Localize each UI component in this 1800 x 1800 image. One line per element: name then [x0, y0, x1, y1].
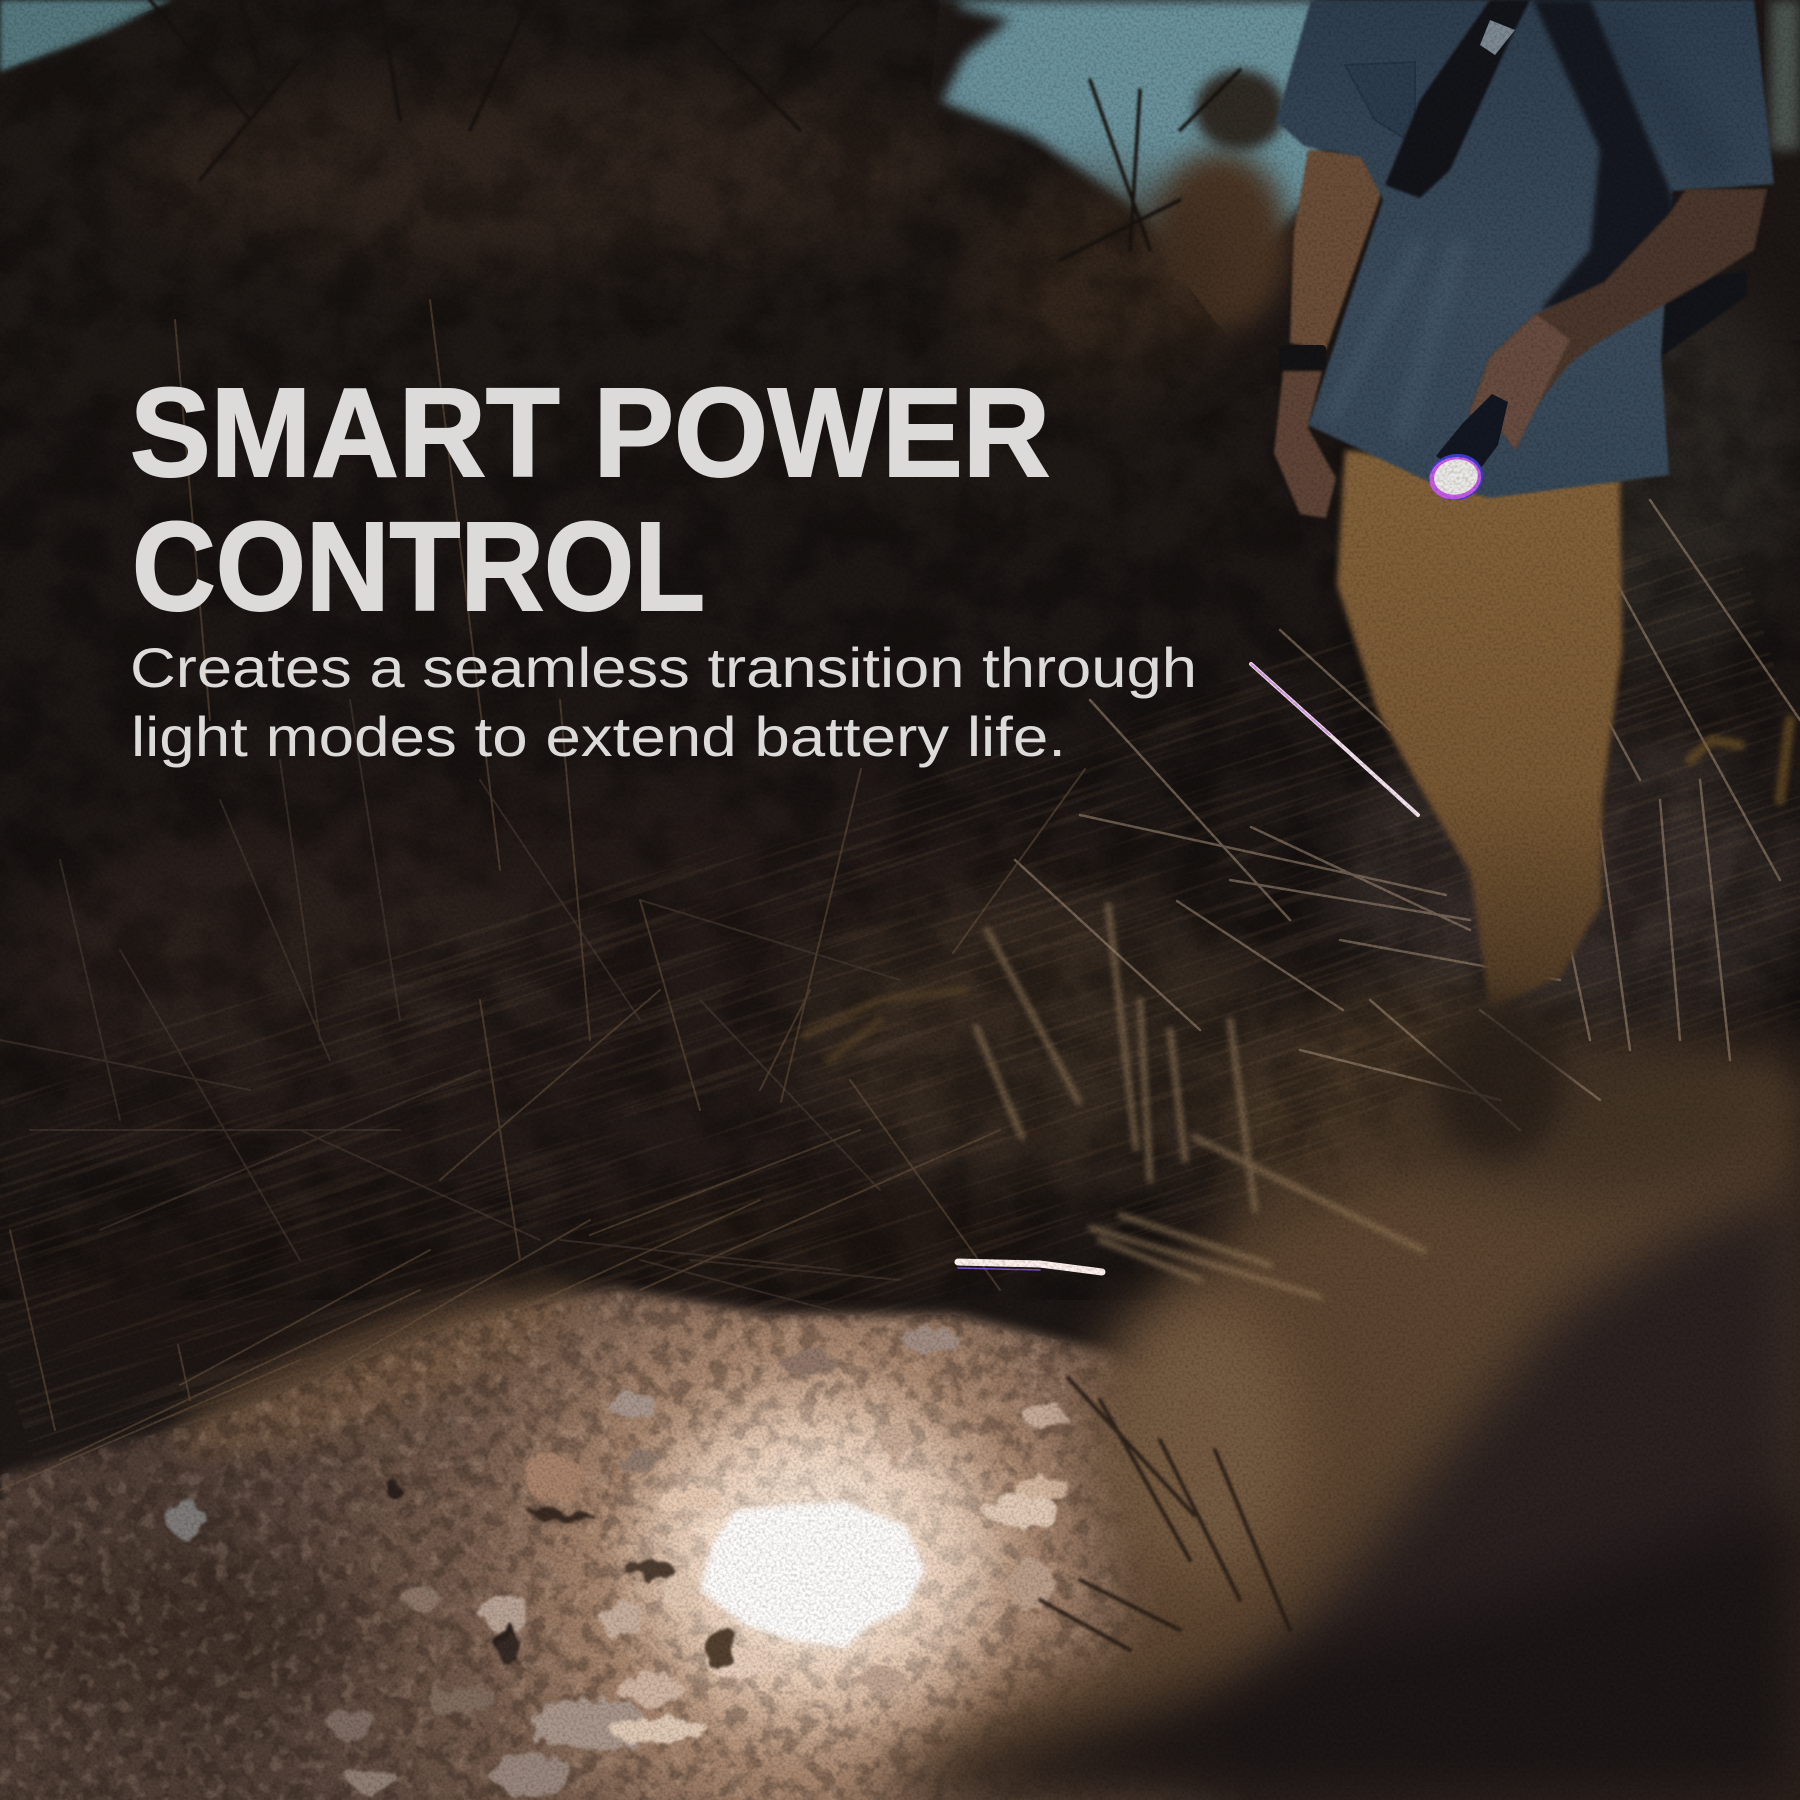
body text: light modes to extend battery life. — [131, 705, 1066, 768]
body text — [130, 636, 1197, 768]
heading: SMART POWER CONTROL — [130, 362, 1050, 637]
heading: SMART POWER CONTROL: CONTROL — [132, 496, 705, 637]
left hand — [1274, 371, 1336, 518]
flashlight body — [1436, 394, 1508, 480]
lit rocks — [166, 1328, 1067, 1797]
dark shoulder strap and shadow — [1533, 0, 1680, 310]
right hand — [1469, 314, 1570, 450]
pants — [1337, 450, 1622, 1010]
brush tones — [0, 70, 1800, 1380]
body text: Creates a seamless transition through — [130, 636, 1197, 699]
grass streak texture — [0, 519, 1800, 1581]
foliage mottling — [0, 0, 1800, 1300]
water and sky — [0, 0, 1800, 560]
strap buckle — [1480, 20, 1515, 55]
bag behind arm — [1640, 270, 1747, 357]
left arm — [1290, 150, 1383, 350]
watch — [1279, 345, 1326, 369]
boot shadow — [1435, 1000, 1565, 1160]
sling loop — [1385, 0, 1530, 198]
lit mound with flashlight beam — [0, 1252, 1240, 1800]
shirt folds and pocket — [1330, 20, 1720, 440]
shirt — [1276, 0, 1774, 498]
beam hot spot — [700, 1502, 925, 1648]
heading: SMART POWER CONTROL: SMART POWER — [130, 362, 1050, 503]
flashlight lens — [1425, 450, 1487, 504]
person holding flashlight — [1274, 0, 1774, 1160]
right arm — [1469, 189, 1767, 450]
right foreground brush — [860, 1040, 1800, 1800]
